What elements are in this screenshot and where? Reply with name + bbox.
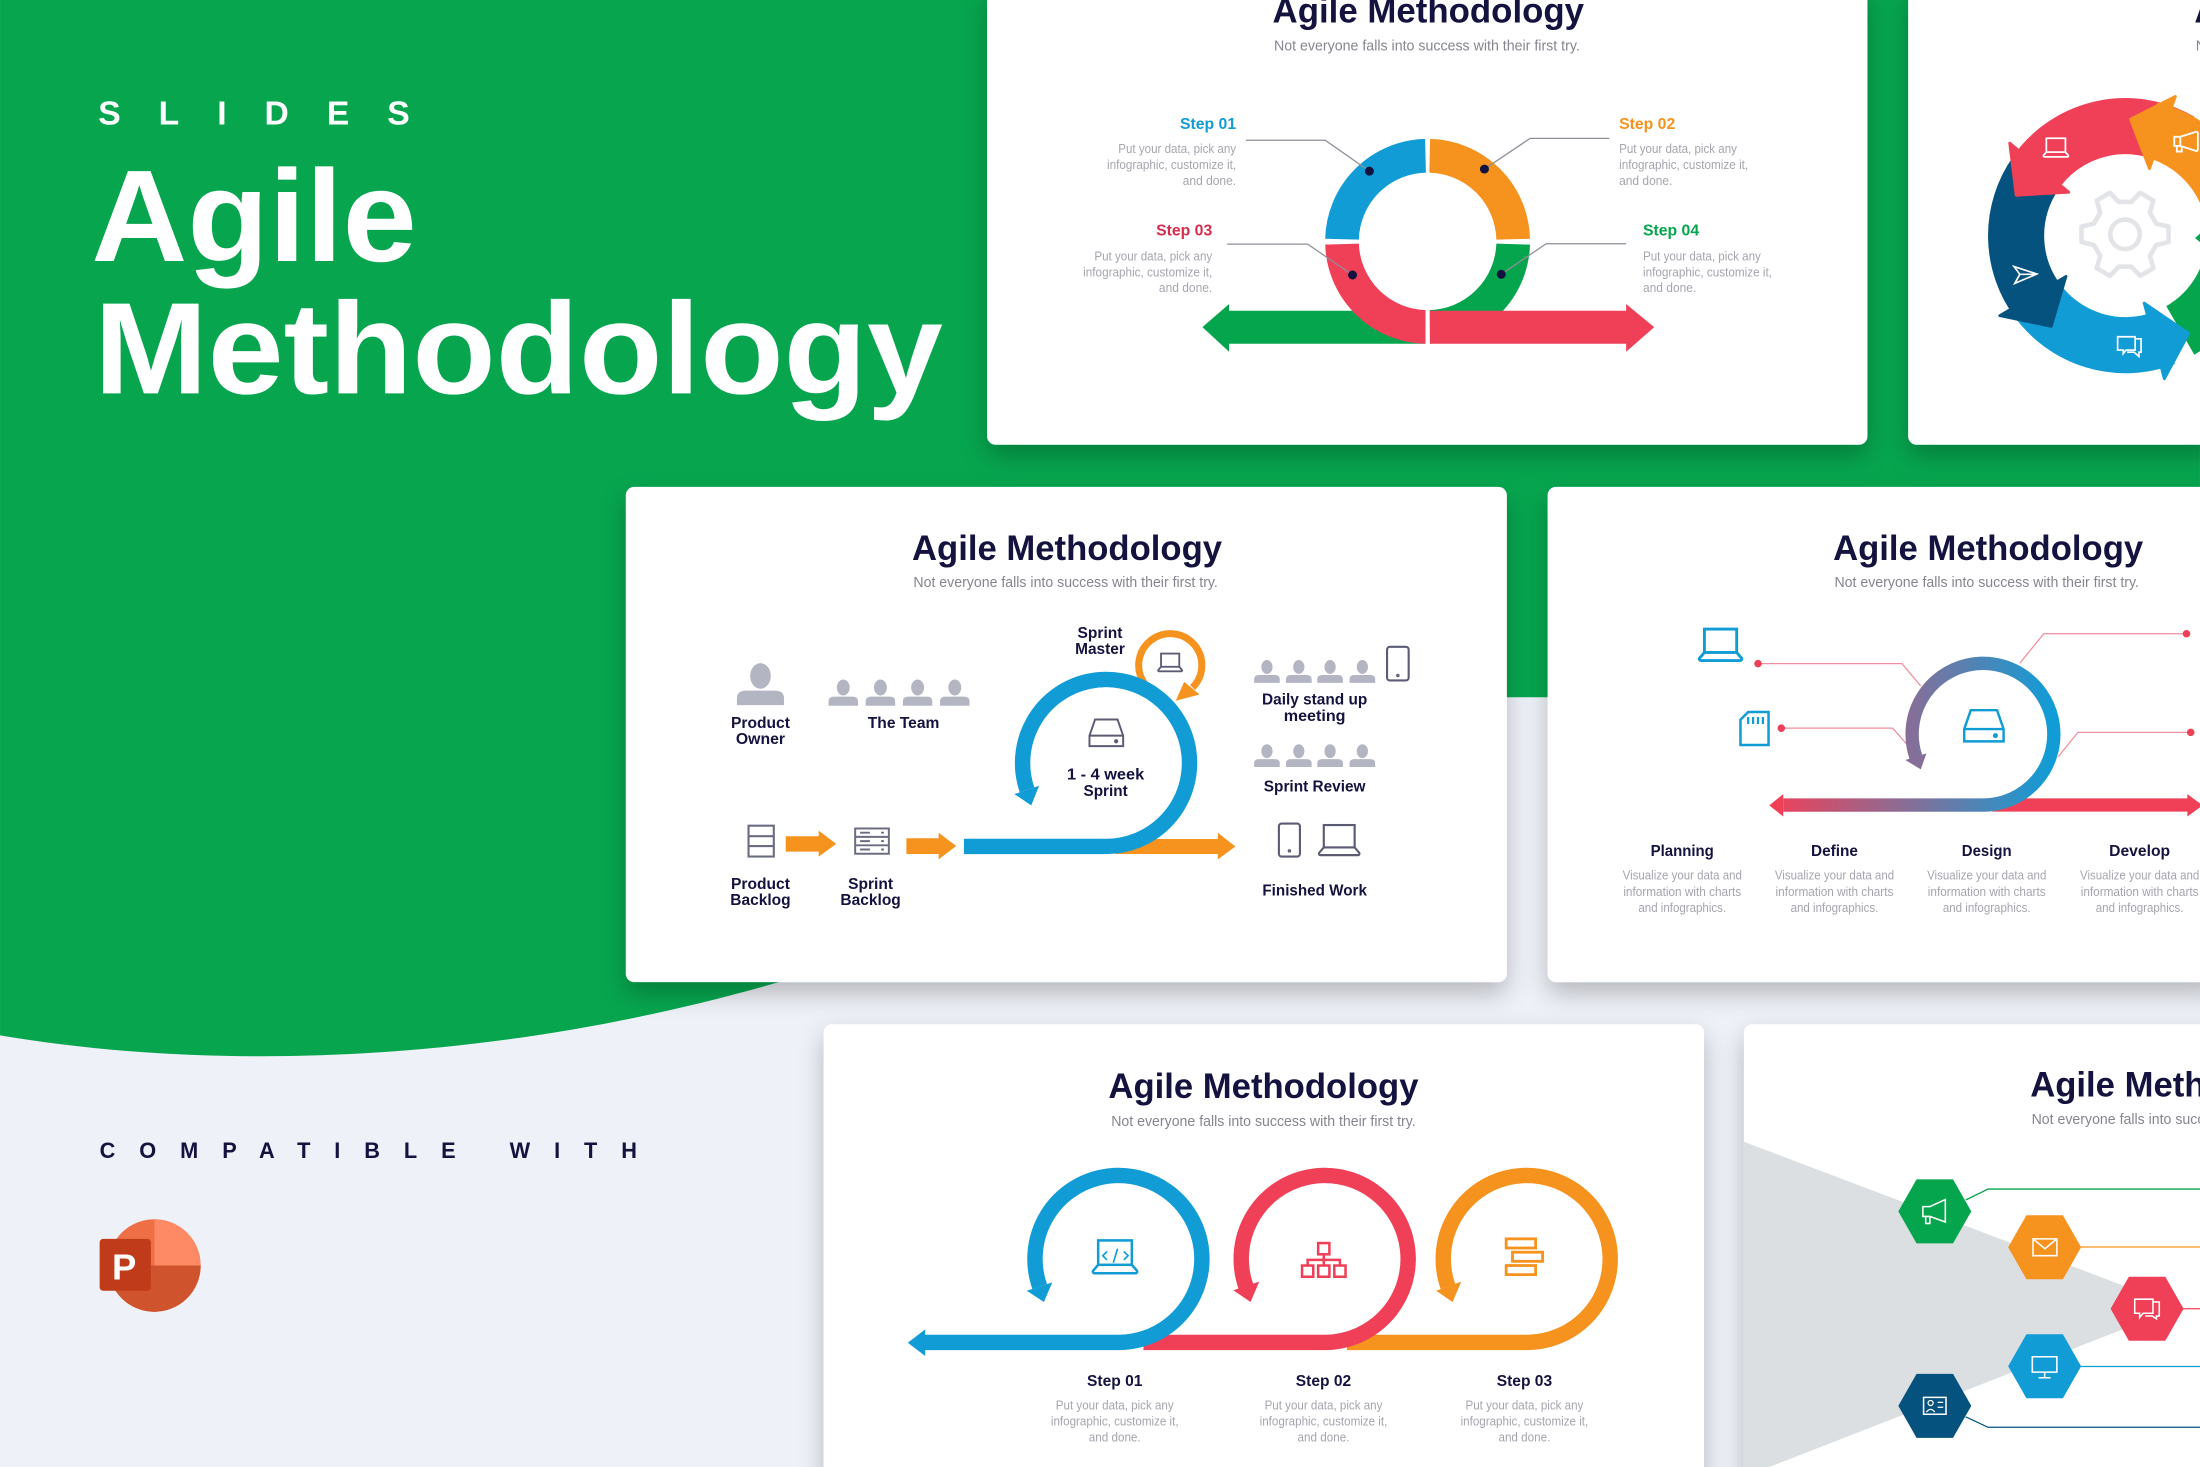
icon: drive (1964, 710, 2004, 741)
icon: PowerPoint logo: P (112, 1247, 136, 1288)
hexagon: monitor (2008, 1334, 2081, 1398)
text: step 04: Put your data, pick any (1643, 249, 1761, 263)
label: daily stand up meeting (1262, 691, 1367, 725)
icon: finished laptop (1319, 825, 1359, 855)
icon: product backlog (749, 826, 774, 857)
icons: sprint review (1254, 744, 1375, 767)
text: step 01 (1107, 115, 1237, 188)
column: design: Visualize your data and (1927, 869, 2046, 883)
text: step 02: and done. (1298, 1431, 1349, 1445)
green header shape (0, 0, 2200, 1056)
text: step 03: infographic, customize it, (1461, 1414, 1588, 1428)
icon: bars (1506, 1239, 1543, 1275)
text: step 03: and done. (1498, 1431, 1550, 1445)
text: step 01: infographic, customize it, (1107, 158, 1236, 172)
main title (91, 143, 943, 421)
text: step 03: Put your data, pick any (1465, 1398, 1584, 1412)
slide title: Agile Methodology (912, 529, 1223, 568)
red arrow to right (1992, 794, 2200, 817)
icon: paper plane (2014, 267, 2037, 283)
label: finished work: Finished Work (1262, 881, 1367, 899)
icon: phone (1387, 647, 1409, 680)
icon: chat bubbles (2118, 337, 2141, 356)
icon: laptop (1699, 629, 1742, 661)
slide subtitle: Not everyone falls into success with their first try. (1834, 575, 2139, 591)
text: step 04: infographic, customize it, (1643, 265, 1772, 279)
label: 1-4 week sprint (1067, 766, 1144, 800)
panel: three step loops slide (824, 1024, 1704, 1467)
panel: sprint process slide (626, 487, 1507, 982)
slide title: Agile Methodology (1833, 529, 2144, 568)
label: sprint master (1075, 624, 1126, 658)
text: step 02 (1260, 1372, 1387, 1445)
icon: drive (1089, 719, 1123, 746)
column: planning: Visualize your data and (1623, 869, 1742, 883)
text: step 01: Put your data, pick any (1118, 142, 1237, 156)
panel: slide with ring and four steps (987, 0, 1867, 445)
chart: circular arrow cycle (2000, 96, 2200, 379)
label: sprint backlog: Backlog (840, 891, 901, 909)
icon: gear (2082, 193, 2169, 276)
label: sprint backlog: Sprint (848, 875, 894, 893)
column: planning (1623, 842, 1742, 915)
text: step 02: infographic, customize it, (1260, 1414, 1387, 1428)
icon: product owner (737, 663, 784, 705)
column: define: Visualize your data and (1775, 869, 1894, 883)
icons: daily stand up (1254, 660, 1375, 683)
text: step 02: and done. (1619, 174, 1672, 188)
column: define: and infographics. (1791, 901, 1878, 915)
text: step 02 (1619, 115, 1748, 188)
text: step 04: Step 04 (1643, 222, 1699, 240)
icon: hierarchy (1302, 1243, 1346, 1277)
label: sprint master: Master (1075, 640, 1126, 658)
chart: blue loop (908, 1175, 1202, 1356)
main title: Agile (91, 143, 417, 289)
text: step 01: Step 01 (1180, 115, 1236, 133)
arrow: to sprint (906, 833, 956, 859)
column: develop: Develop (2109, 842, 2170, 860)
grey funnel triangle (1744, 1142, 2180, 1467)
chart: red loop (1143, 1175, 1408, 1342)
orange output arrow (1115, 833, 1235, 859)
slide title: Agile Methodology (1108, 1067, 1419, 1106)
callout lines and dots (1227, 138, 1626, 279)
panel: planning define design develop slide (1548, 487, 2200, 982)
column: define: Define (1811, 842, 1858, 860)
text: step 03 (1461, 1372, 1588, 1445)
text: step 02: Step 02 (1296, 1372, 1351, 1390)
label: product backlog (730, 875, 791, 909)
label: product owner: Owner (736, 730, 786, 748)
label: daily stand up meeting: meeting (1284, 707, 1346, 725)
icon: code laptop (1093, 1240, 1137, 1273)
icon: finished phone (1279, 824, 1300, 857)
hexagon: chat (2111, 1277, 2184, 1341)
chart: orange loop (1347, 1175, 1610, 1342)
icon: sprint master laptop (1158, 654, 1182, 671)
hexagon: envelope (2008, 1215, 2081, 1279)
label: sprint master: Sprint (1078, 624, 1123, 642)
text: step 03: Put your data, pick any (1094, 249, 1213, 263)
label: product owner: Product (731, 714, 791, 732)
label: the team: The Team (868, 714, 939, 732)
column: develop: and infographics. (2096, 901, 2183, 915)
hexagon: megaphone (1898, 1179, 1971, 1243)
icon: memory card (1740, 712, 1769, 745)
chart: ring with double arrow (1202, 156, 1654, 352)
label: product owner (731, 714, 791, 748)
text: step 04: and done. (1643, 281, 1696, 295)
slide subtitle: Not everyone falls into success with their first try. (1274, 39, 1580, 55)
callout lines and dots (1754, 630, 2194, 757)
text: step 03: and done. (1159, 281, 1212, 295)
panel: slide with circular arrows (1908, 0, 2200, 445)
column: design: and infographics. (1943, 901, 2031, 915)
text: step 01: Step 01 (1087, 1372, 1142, 1390)
column: design: Design (1962, 842, 2012, 860)
column: planning: and infographics. (1638, 901, 1726, 915)
text: step 02: Put your data, pick any (1619, 142, 1738, 156)
icon: sprint backlog (855, 828, 889, 854)
main title: Methodology (94, 275, 943, 421)
column: design: information with charts (1928, 885, 2046, 899)
hexagon: id card (1898, 1374, 1971, 1438)
icon: laptop (2043, 138, 2068, 157)
label: 1-4 week sprint: 1 - 4 week (1067, 766, 1144, 784)
icon: PowerPoint logo (100, 1219, 201, 1312)
label: product backlog: Product (731, 875, 791, 893)
text: step 02: Put your data, pick any (1265, 1398, 1383, 1412)
chart: sprint master small loop (1139, 634, 1202, 701)
text: step 01: and done. (1089, 1431, 1141, 1445)
arrow: to sprint backlog (786, 831, 836, 857)
slide subtitle: Not everyone falls into success with their first try. (1111, 1114, 1416, 1130)
text: step 03: Step 03 (1156, 222, 1212, 240)
text: step 04 (1643, 222, 1772, 295)
label: sprint backlog (840, 875, 901, 909)
icon: megaphone (2174, 132, 2198, 152)
column: define (1775, 842, 1894, 915)
column: define: information with charts (1776, 885, 1893, 899)
column: planning: Planning (1651, 842, 1714, 860)
label: compatible with: COMPATIBLE WITH (100, 1138, 637, 1163)
chart: gradient loop arrow (1769, 663, 2054, 817)
slide subtitle: Not everyone falls into success with their first try. (913, 575, 1218, 591)
text: step 03: infographic, customize it, (1083, 265, 1212, 279)
column: develop (2080, 842, 2199, 915)
text: step 03 (1083, 222, 1213, 295)
column: planning: information with charts (1623, 885, 1741, 899)
label: product backlog: Backlog (730, 891, 791, 909)
column: design (1927, 842, 2046, 915)
text: step 01: infographic, customize it, (1051, 1414, 1179, 1428)
label: 1-4 week sprint: Sprint (1084, 782, 1128, 800)
text: step 02: infographic, customize it, (1619, 158, 1748, 172)
text: step 03: Step 03 (1497, 1372, 1552, 1390)
text: step 01: Put your data, pick any (1056, 1398, 1174, 1412)
text: step 01 (1051, 1372, 1179, 1445)
chart: sprint loop (964, 679, 1190, 846)
connector lines (1966, 1189, 2200, 1427)
panel: funnel hexagon slide (1744, 1024, 2200, 1467)
label: daily stand up meeting: Daily stand up (1262, 691, 1367, 709)
heading: SLIDES: SLIDES (98, 95, 410, 132)
text: step 02: Step 02 (1619, 115, 1675, 133)
icons: the team (829, 679, 970, 706)
text: step 01: and done. (1183, 174, 1236, 188)
label: sprint review: Sprint Review (1264, 778, 1366, 796)
